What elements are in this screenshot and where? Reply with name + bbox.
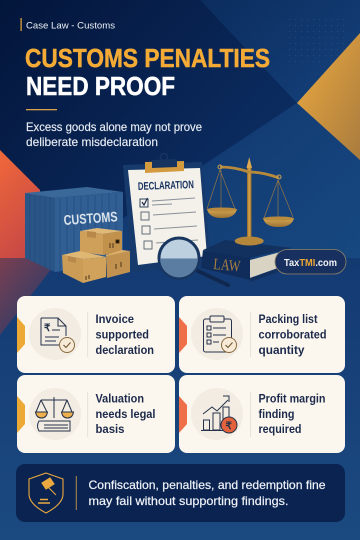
subtitle: deliberate misdeclaration [26,135,158,149]
callout text: may fail without supporting findings. [88,494,288,508]
checklist [140,198,198,249]
icon: scales and book [29,388,81,440]
divider [86,312,89,357]
illustration: declaration clipboard [123,154,211,272]
icon: growth chart [191,388,243,440]
card text: supported [96,330,149,342]
card text: Packing list [258,314,318,326]
icon: growth chart: ₹ [226,421,232,432]
icon: shield and gavel [29,473,63,513]
container label: CUSTOMS [63,208,118,228]
card text: basis [96,424,124,436]
card text: declaration [96,345,154,357]
card: invoice supported declaration [17,296,175,373]
decorative orange triangle [0,150,40,258]
icon: packing list [191,308,243,360]
card text: needs legal [96,409,156,421]
icon: invoice: ₹ [44,323,51,334]
divider [249,392,252,437]
title [25,43,270,101]
divider [249,312,252,357]
illustration: customs container [25,187,123,272]
callout text [88,478,326,508]
callout: bottom conclusion [16,464,345,522]
divider [75,476,78,510]
book title: LAW [213,256,242,275]
card text: quantity [258,345,305,357]
card text: required [258,424,302,436]
title: CUSTOMS PENALTIES [25,43,270,73]
card text: corroborated [258,330,326,342]
icon: invoice [29,308,81,360]
left box [62,251,106,259]
right box [106,251,130,278]
card: packing list corroborated quantity [179,296,345,373]
divider [86,392,89,437]
card text [96,394,156,436]
illustration: law book [201,240,292,282]
card text [96,314,154,357]
tag: case law: Case Law - Customs [26,20,115,32]
illustration: gold scales [207,157,294,246]
card text: finding [258,409,294,421]
badge: TaxTMI.com [275,250,346,274]
clipboard heading: DECLARATION [138,179,194,193]
card text [258,314,326,357]
clipboard clip [145,161,184,173]
card: profit margin finding required [179,375,345,453]
card text [258,394,326,436]
card: valuation needs legal basis [17,375,175,453]
card text: Invoice [96,314,134,326]
illustration: magnifying glass [159,238,228,285]
decorative gold triangle [297,33,360,160]
subtitle: Excess goods alone may not prove [26,120,202,134]
subtitle [26,120,202,149]
title: NEED PROOF [26,71,175,101]
illustration: cardboard boxes [62,228,130,283]
badge: TaxTMI.com: TaxTMI.com [284,258,337,269]
title rule [26,109,57,110]
card text: Valuation [96,394,144,406]
card text: Profit margin [258,394,326,406]
top box [80,228,122,234]
callout text: Confiscation, penalties, and redemption fine [88,478,326,492]
